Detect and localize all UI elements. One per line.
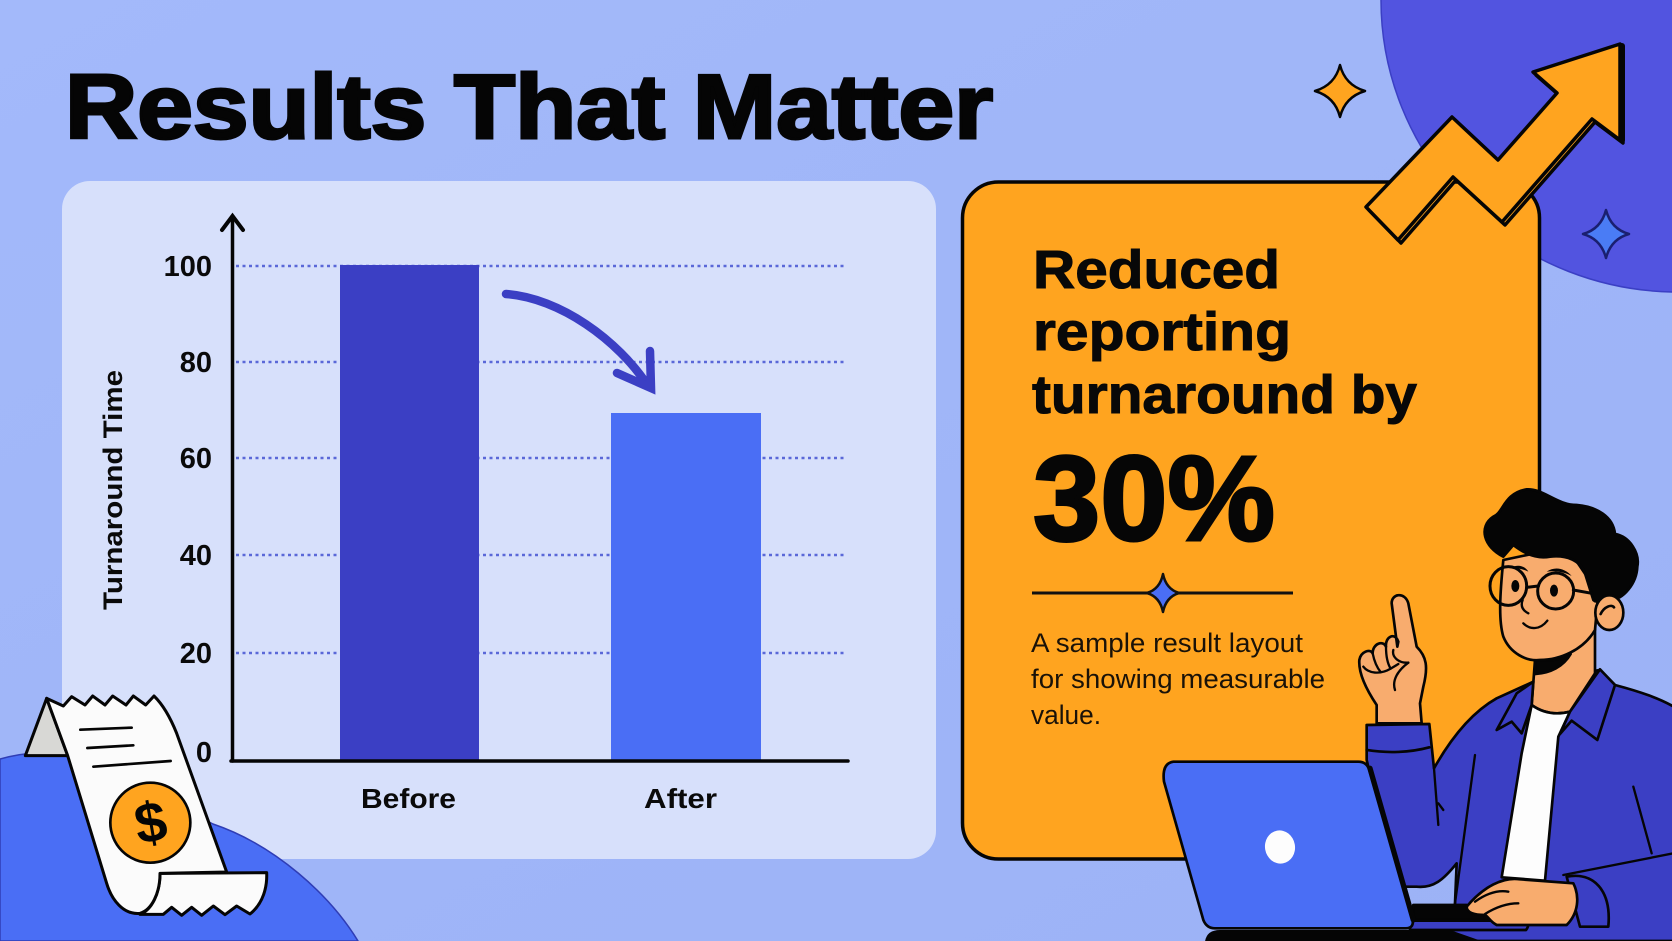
table edge bbox=[1205, 930, 1483, 941]
panel: result card bbox=[962, 182, 1540, 859]
glasses bbox=[1490, 567, 1592, 609]
receipt paper bbox=[47, 696, 227, 913]
title: Results That Matter bbox=[65, 57, 993, 158]
bar: after bbox=[611, 413, 761, 761]
hand finger lines bbox=[1475, 891, 1518, 914]
decorative circle: top right bbox=[1381, 0, 1672, 292]
receipt back fold bbox=[25, 698, 68, 756]
description line 1: A sample result layout bbox=[1031, 628, 1304, 658]
result description bbox=[1031, 628, 1325, 730]
eyes bbox=[1511, 566, 1572, 597]
receipt roll bottom bbox=[140, 873, 267, 915]
dollar coin bbox=[110, 783, 190, 863]
receipt text lines bbox=[80, 728, 171, 767]
description line 2: for showing measurable bbox=[1031, 664, 1325, 694]
gridlines bbox=[236, 266, 846, 653]
bar chart bbox=[98, 216, 848, 814]
typing hand bbox=[1467, 879, 1577, 925]
laptop base bbox=[1413, 905, 1490, 920]
sleeve cuff bbox=[1367, 747, 1429, 752]
axes bbox=[222, 216, 848, 761]
y axis title: Turnaround Time bbox=[98, 370, 128, 610]
nose and smile bbox=[1522, 600, 1547, 628]
neck bbox=[1532, 627, 1595, 713]
panel: chart background bbox=[62, 181, 936, 859]
result heading bbox=[1032, 240, 1417, 425]
jacket bbox=[1367, 670, 1672, 941]
y axis tick labels: 80 bbox=[180, 347, 212, 379]
y axis tick labels: 40 bbox=[180, 540, 212, 572]
hair bbox=[1485, 489, 1638, 601]
chin shadow bbox=[1535, 654, 1571, 674]
collar left bbox=[1497, 682, 1533, 733]
arrow: decrease bbox=[506, 294, 651, 388]
pointing hand bbox=[1359, 595, 1426, 723]
y axis tick labels: 100 bbox=[164, 251, 212, 283]
description line 3: value. bbox=[1031, 700, 1101, 730]
y axis tick labels: 0 bbox=[196, 737, 212, 769]
line 1: Reduced bbox=[1033, 240, 1280, 300]
decorative blob: bottom left bbox=[0, 752, 358, 941]
line 2: reporting bbox=[1033, 302, 1291, 362]
line 3: turnaround by bbox=[1032, 365, 1417, 425]
collar right bbox=[1560, 669, 1615, 740]
laptop screen bbox=[1164, 762, 1413, 928]
ear detail bbox=[1601, 606, 1614, 614]
icon: blue sparkle bbox=[1583, 210, 1629, 258]
shirt bbox=[1502, 705, 1570, 881]
head bbox=[1500, 547, 1598, 660]
ear bbox=[1595, 595, 1623, 630]
x axis label: after: After bbox=[644, 783, 717, 814]
illustration: person with laptop bbox=[1164, 489, 1672, 941]
y axis tick labels bbox=[164, 251, 212, 769]
divider with star bbox=[1032, 574, 1293, 612]
big number: 30% bbox=[1033, 430, 1275, 566]
y axis tick labels: 60 bbox=[180, 443, 212, 475]
jacket lines bbox=[1434, 755, 1672, 903]
x axis label: before: Before bbox=[361, 783, 456, 814]
bar: before bbox=[340, 265, 479, 761]
right cuff bbox=[1567, 876, 1609, 927]
y axis tick labels: 20 bbox=[180, 638, 212, 670]
laptop logo bbox=[1262, 828, 1298, 866]
icon: orange sparkle bbox=[1315, 65, 1365, 117]
dollar sign: $ bbox=[130, 790, 172, 857]
finger lines bbox=[1363, 647, 1408, 690]
laptop edge bbox=[1370, 768, 1413, 920]
icon: receipt bbox=[25, 696, 267, 915]
icon: rising arrow bbox=[1366, 44, 1623, 243]
